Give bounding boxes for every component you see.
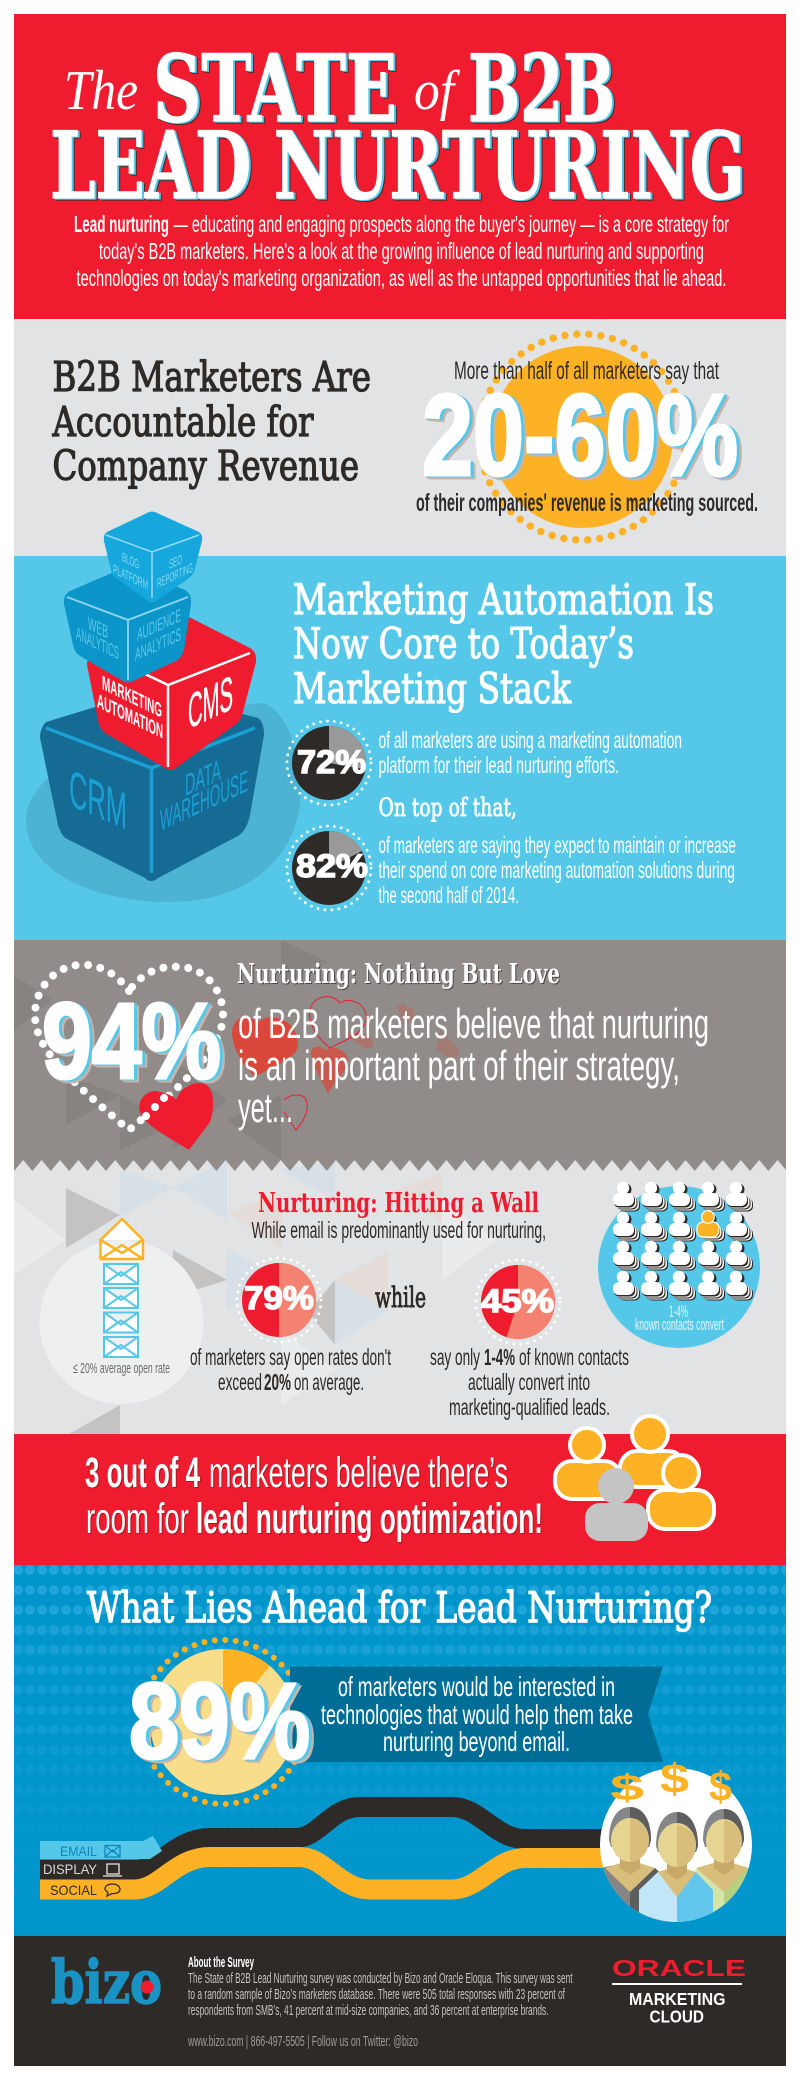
cube: marketing automation and CMS: AUTOMATION	[97, 690, 163, 743]
text: known contacts	[430, 1344, 629, 1420]
person: middle	[639, 1812, 713, 1925]
icon: group of people	[555, 1416, 714, 1541]
panel: hitting a wall	[14, 1150, 786, 1434]
ribbon text	[321, 1671, 633, 1757]
panel: accountable for revenue	[14, 319, 786, 556]
red outline hearts	[284, 997, 366, 1130]
cube: marketing automation and CMS: CMS	[188, 665, 233, 739]
intro text: Lead nurturing	[74, 211, 169, 237]
ribbon	[290, 1666, 663, 1762]
text: known contacts: actually convert into	[468, 1369, 590, 1395]
person: right	[695, 1809, 748, 1918]
ribbon text: of marketers would be interested in	[338, 1671, 615, 1702]
dollar signs: $	[709, 1763, 732, 1810]
text: open rates: on average.	[294, 1369, 364, 1395]
text: open rates: exceed	[218, 1369, 262, 1395]
heading: B2B marketers accountable: Company Revenue	[52, 442, 359, 490]
cube: web and audience analytics	[64, 566, 191, 682]
dollar signs: $	[610, 1767, 644, 1808]
cube shadow	[26, 703, 301, 902]
text: 94% statement: yet...	[238, 1084, 293, 1131]
channel stream: display	[40, 1807, 610, 1870]
cube: web and audience analytics: ANALYTICS	[135, 625, 181, 666]
text: known contacts: marketing-qualified leads.	[449, 1394, 610, 1420]
cube: blog platform and SEO reporting: PLATFORM	[113, 562, 148, 593]
pie: 79%	[237, 1258, 321, 1342]
cube: CRM and data warehouse: DATA	[185, 752, 221, 803]
cube: blog platform and SEO reporting	[104, 512, 202, 602]
logo: oracle marketing cloud: MARKETING	[629, 1989, 726, 2009]
heading: B2B marketers accountable	[52, 353, 371, 490]
callout: 3 out of 4	[85, 1449, 543, 1543]
logo: oracle marketing cloud: CLOUD	[650, 2006, 704, 2026]
icon: open orange envelope	[100, 1219, 143, 1259]
panel: title banner	[14, 14, 786, 319]
cube: blog platform and SEO reporting: BLOG	[122, 550, 139, 572]
heading: about the survey: About the Survey	[188, 1954, 254, 1971]
caption: average open rate: ≤ 20% average open rate	[73, 1360, 170, 1377]
cube: web and audience analytics: WEB	[88, 614, 108, 643]
channel label: social: SOCIAL	[50, 1882, 97, 1898]
heading: B2B marketers accountable: B2B Marketers Are	[52, 353, 371, 401]
cube: marketing automation and CMS	[87, 617, 256, 770]
heading: marketing automation core: Marketing Stack	[293, 664, 571, 713]
contact line: www.bizo.com | 866-497-5505 | Follow us on Twitter: @bizo	[187, 2033, 418, 2050]
faint hearts	[232, 1004, 460, 1094]
orange circle with dotted ring	[479, 334, 685, 540]
logo: bizo: bizo	[51, 1948, 162, 2018]
text: open rates: of marketers say open rates don't	[190, 1344, 391, 1370]
callout: 3 out of 4: lead nurturing optimization!	[196, 1495, 543, 1543]
title: The State of B2B Lead Nurturing: The	[64, 60, 138, 122]
text: 94% statement	[238, 1000, 709, 1131]
text: known contacts: of known contacts	[519, 1344, 629, 1370]
dollar signs	[610, 1755, 732, 1810]
dots over heart	[142, 1094, 168, 1120]
channel stream: social	[40, 1857, 610, 1890]
logo: oracle marketing cloud	[612, 1955, 746, 2026]
cube: CRM and data warehouse	[40, 690, 264, 881]
pie: 89%	[141, 1640, 305, 1804]
dollar signs: $	[660, 1755, 689, 1802]
ribbon text: technologies that would help them take	[321, 1699, 633, 1730]
cube: web and audience analytics: ANALYTICS	[76, 624, 119, 664]
channel label: email: EMAIL	[60, 1843, 97, 1859]
title: The State of B2B Lead Nurturing: STATE	[153, 34, 397, 143]
callout: 3 out of 4: room for	[86, 1495, 189, 1543]
cube: CRM and data warehouse: WAREHOUSE	[160, 763, 248, 838]
subheading: While email is predominantly used for nurturing,	[252, 1217, 546, 1243]
panel: footer	[14, 1936, 786, 2066]
channel label: display: DISPLAY	[43, 1861, 98, 1877]
pie: 45%	[476, 1260, 560, 1344]
heading: nothing but love: Nurturing: Nothing But Love	[237, 959, 560, 990]
text: 72% of marketers: platform for their lead nurturing efforts.	[378, 752, 619, 778]
heading: marketing automation core: Now Core to Today’s	[293, 619, 634, 668]
pie: 82%: 82%	[296, 848, 368, 884]
panel: nothing but love	[14, 940, 786, 1171]
heading: marketing automation core	[293, 575, 714, 713]
word: while: while	[375, 1281, 426, 1314]
text: open rates	[190, 1344, 391, 1395]
cube: blog platform and SEO reporting: REPORTING	[157, 560, 193, 591]
callout: 3 out of 4: 3 out of 4	[85, 1449, 200, 1497]
cube: CRM and data warehouse: CRM	[69, 758, 127, 841]
cube: marketing automation and CMS: MARKETING	[102, 672, 162, 723]
channel label: email	[40, 1836, 162, 1859]
title: The State of B2B Lead Nurturing	[50, 34, 745, 220]
pie: 72%: 72%	[297, 744, 366, 780]
stat: 94%: 94%	[42, 980, 221, 1101]
icons: blue envelopes	[104, 1264, 138, 1357]
envelope stack panel	[40, 1219, 204, 1404]
text: open rates: 20%	[264, 1369, 291, 1395]
person: left	[603, 1807, 666, 1922]
circle: people who convert: 1-4%	[669, 1302, 688, 1321]
subheading: on top of that: On top of that,	[378, 793, 517, 822]
cube: web and audience analytics: AUDIENCE	[137, 606, 181, 646]
intro text	[74, 211, 729, 291]
pie: 79%: 79%	[244, 1280, 314, 1316]
stat: 89%: 89%	[129, 1660, 310, 1781]
pie: 72%	[287, 721, 371, 805]
pie: 82%	[287, 826, 371, 910]
logo: oracle marketing cloud: ORACLE	[612, 1955, 746, 1981]
people circle	[600, 1762, 752, 1922]
icon: red heart	[139, 1083, 213, 1150]
title: The State of B2B Lead Nurturing: of	[414, 60, 461, 122]
ribbon text: nurturing beyond email.	[383, 1726, 570, 1757]
panel: marketing automation	[14, 512, 786, 940]
circle: people who convert	[598, 1182, 760, 1348]
text: known contacts: 1-4%	[484, 1344, 515, 1370]
icons: contact grid	[613, 1182, 753, 1300]
callout: 3 out of 4: marketers believe there’s	[209, 1449, 508, 1497]
text: 72% of marketers	[378, 727, 682, 778]
text: known contacts: say only	[430, 1344, 480, 1370]
icon: dotted heart outline	[35, 965, 223, 1130]
text: 82% of marketers	[378, 832, 736, 908]
title: The State of B2B Lead Nurturing: B2B	[468, 34, 615, 143]
panel: what lies ahead	[14, 1565, 786, 1936]
panel: red optimization banner	[14, 1416, 786, 1565]
text: 82% of marketers: the second half of 2014.	[378, 882, 519, 908]
heading: B2B marketers accountable: Accountable for	[52, 398, 314, 446]
pie: 45%: 45%	[481, 1283, 554, 1319]
cube: blog platform and SEO reporting: SEO	[169, 552, 182, 572]
survey text	[188, 1970, 573, 2019]
heading: hitting a wall: Nurturing: Hitting a Wall	[258, 1188, 539, 1219]
